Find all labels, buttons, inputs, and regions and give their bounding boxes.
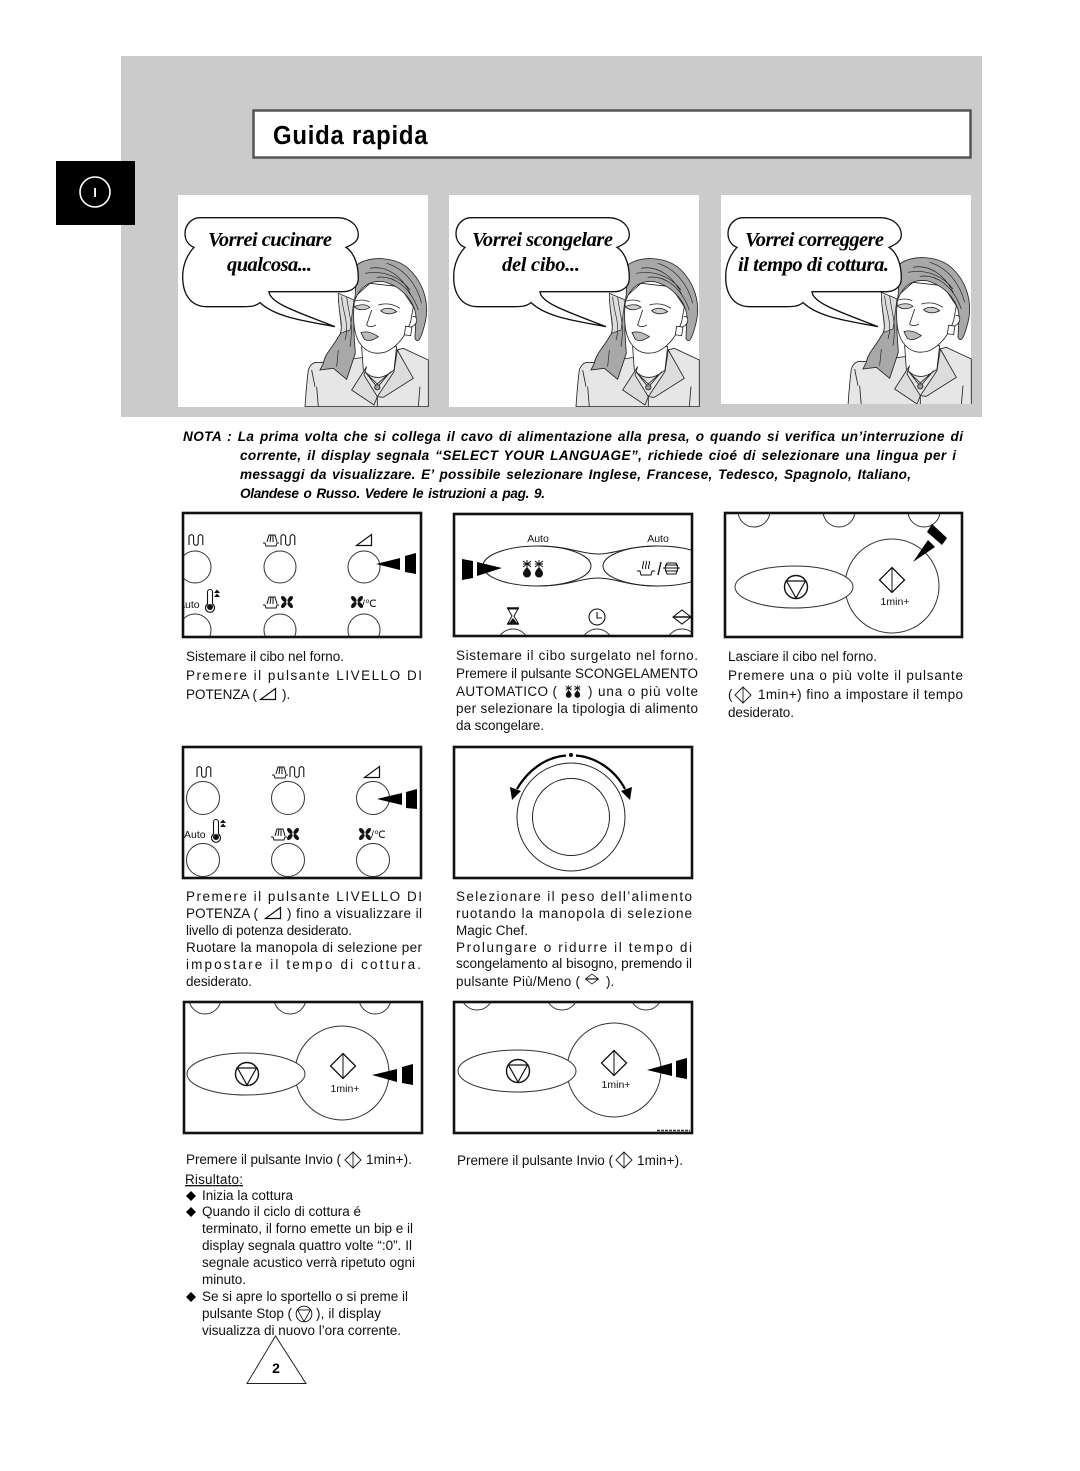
text: step 3 middle: 1min+).	[637, 1153, 683, 1168]
text: step 1 right: Lasciare il cibo nel forno.	[728, 649, 877, 664]
bullet 2: Quando il ciclo di cottura é	[202, 1204, 361, 1219]
bullet 2: segnale acustico verrà ripetuto ogni	[202, 1255, 415, 1270]
text: step 3 left: 1min+).	[366, 1152, 412, 1167]
bullet 2	[186, 1204, 415, 1287]
text: step 2 middle	[456, 889, 692, 989]
text: step 2 middle: scongelamento al bisogno, premendo il	[456, 956, 692, 971]
diagram: start button middle: 1min+	[602, 1079, 630, 1091]
text: step 1 left	[186, 649, 422, 702]
text: step 3 left	[186, 1152, 412, 1168]
text: step 2 left: livello di potenza desiderato.	[186, 923, 352, 938]
text: step 1 left: Premere il pulsante LIVELLO DI	[186, 668, 422, 683]
bullet 3: visualizza di nuovo l’ora corrente.	[202, 1323, 401, 1338]
text: step 1 middle: ) una o più volte	[588, 684, 698, 699]
note: Olandese o Russo. Vedere le istruzioni a pag. 9.	[240, 486, 545, 501]
text: step 2 middle: Selezionare il peso dell’alimento	[456, 889, 692, 904]
speech bubble: adjust time: il tempo di cottura.	[738, 254, 889, 276]
diagram: power button full: Auto	[184, 829, 206, 841]
diagram: power button: /℃	[362, 598, 377, 610]
text: step 2 middle: Prolungare o ridurre il tempo di	[456, 940, 692, 955]
result heading: Risultato:	[185, 1172, 243, 1187]
bullet 3: Se si apre lo sportello o si preme il	[202, 1289, 408, 1304]
diagram: power button	[178, 513, 421, 646]
diagram: start button left	[184, 982, 422, 1133]
speech bubble: defrost: del cibo...	[502, 254, 580, 276]
text: step 2 middle: ruotando la manopola di selezione	[456, 906, 692, 921]
text: step 1 right	[728, 649, 963, 720]
text: step 2 middle: pulsante Più/Meno (	[456, 974, 580, 989]
text: step 3 left: Premere il pulsante Invio (	[186, 1152, 342, 1167]
text: step 2 middle: Magic Chef.	[456, 923, 528, 938]
text: step 2 middle: ).	[606, 974, 614, 989]
bullet 3: pulsante Stop (	[202, 1306, 292, 1321]
result list	[186, 1188, 415, 1338]
text: step 2 left: Ruotare la manopola di selezione per	[186, 940, 422, 955]
title: Guida rapida	[273, 121, 429, 150]
diagram: auto defrost button: Auto	[647, 533, 669, 545]
bullet 1: Inizia la cottura	[202, 1188, 293, 1203]
bullet 3: ), il display	[316, 1306, 381, 1321]
speech bubble: cook: qualcosa...	[227, 254, 312, 276]
diagram: selection dial	[454, 747, 692, 878]
diagram: start button left: 1min+	[331, 1083, 359, 1095]
text: step 1 middle: AUTOMATICO (	[456, 684, 558, 699]
panel: cook	[178, 195, 428, 407]
page number	[247, 1336, 306, 1384]
text: step 1 middle: Premere il pulsante SCONGELAMENTO	[456, 666, 698, 681]
diagram: start button middle	[454, 978, 692, 1133]
text: step 2 left	[186, 889, 422, 989]
diagram: power button: Auto	[178, 599, 200, 611]
text: step 1 middle	[456, 648, 698, 733]
diagram: start button with diagonal arrow	[725, 495, 962, 637]
diagram: power button full: /℃	[371, 829, 386, 841]
note	[183, 429, 964, 501]
speech bubble: defrost	[454, 218, 629, 327]
text: step 1 left: POTENZA (	[186, 687, 258, 702]
speech bubble: defrost: Vorrei scongelare	[472, 229, 613, 251]
text: step 2 left: POTENZA (	[186, 906, 258, 921]
note: NOTA : La prima volta che si collega il cavo di alimentazione alla presa, o quando si verifica un’interruzione di	[183, 429, 964, 444]
note: corrente, il display segnala “SELECT YOUR LANGUAGE”, richiede cioé di selezionare una lingua per i	[240, 448, 957, 463]
panel: adjust time	[721, 195, 972, 409]
bullet 2: minuto.	[202, 1272, 246, 1287]
text: step 2 left: impostare il tempo di cottura.	[186, 957, 421, 972]
speech bubble: cook: Vorrei cucinare	[208, 229, 332, 251]
text: step 1 middle: per selezionare la tipologia di alimento	[456, 701, 698, 716]
note: messaggi da visualizzare. E’ possibile selezionare Inglese, Francese, Tedesco, Spagnolo, Italiano,	[240, 467, 911, 482]
text: step 1 left: ).	[282, 687, 290, 702]
title	[254, 110, 970, 158]
text: step 2 left: desiderato.	[186, 974, 252, 989]
speech bubble: adjust time	[726, 218, 901, 327]
text: step 3 middle: Premere il pulsante Invio (	[457, 1153, 614, 1168]
text: step 1 left: Sistemare il cibo nel forno.	[186, 649, 344, 664]
text: step 1 right: 1min+) fino a impostare il tempo	[758, 687, 963, 702]
diagram: start button with diagonal arrow: 1min+	[881, 596, 909, 608]
language tab	[56, 161, 135, 225]
text: step 3 middle	[457, 1152, 683, 1168]
speech bubble: adjust time: Vorrei correggere	[745, 229, 884, 251]
grey header panel	[121, 56, 982, 417]
text: step 2 left: Premere il pulsante LIVELLO DI	[186, 889, 422, 904]
bullet 2: terminato, il forno emette un bip e il	[202, 1221, 413, 1236]
text: step 1 middle: Sistemare il cibo surgelato nel forno.	[456, 648, 698, 663]
bullet 2: display segnala quattro volte “:0”. Il	[202, 1238, 412, 1253]
text: step 1 right: (	[728, 687, 733, 702]
diagram: auto defrost button	[454, 514, 713, 661]
diagram: power button full	[183, 747, 421, 878]
bullet 3	[186, 1289, 408, 1338]
speech bubble: cook	[183, 218, 358, 327]
diagram: auto defrost button: Auto	[527, 533, 549, 545]
text: step 1 right: desiderato.	[728, 705, 794, 720]
panel: defrost	[449, 195, 699, 407]
text: step 2 left: ) fino a visualizzare il	[287, 906, 422, 921]
text: step 1 right: Premere una o più volte il pulsante	[728, 668, 963, 683]
page number: 2	[272, 1360, 280, 1376]
language tab: I	[93, 185, 97, 200]
text: step 1 middle: da scongelare.	[456, 718, 544, 733]
